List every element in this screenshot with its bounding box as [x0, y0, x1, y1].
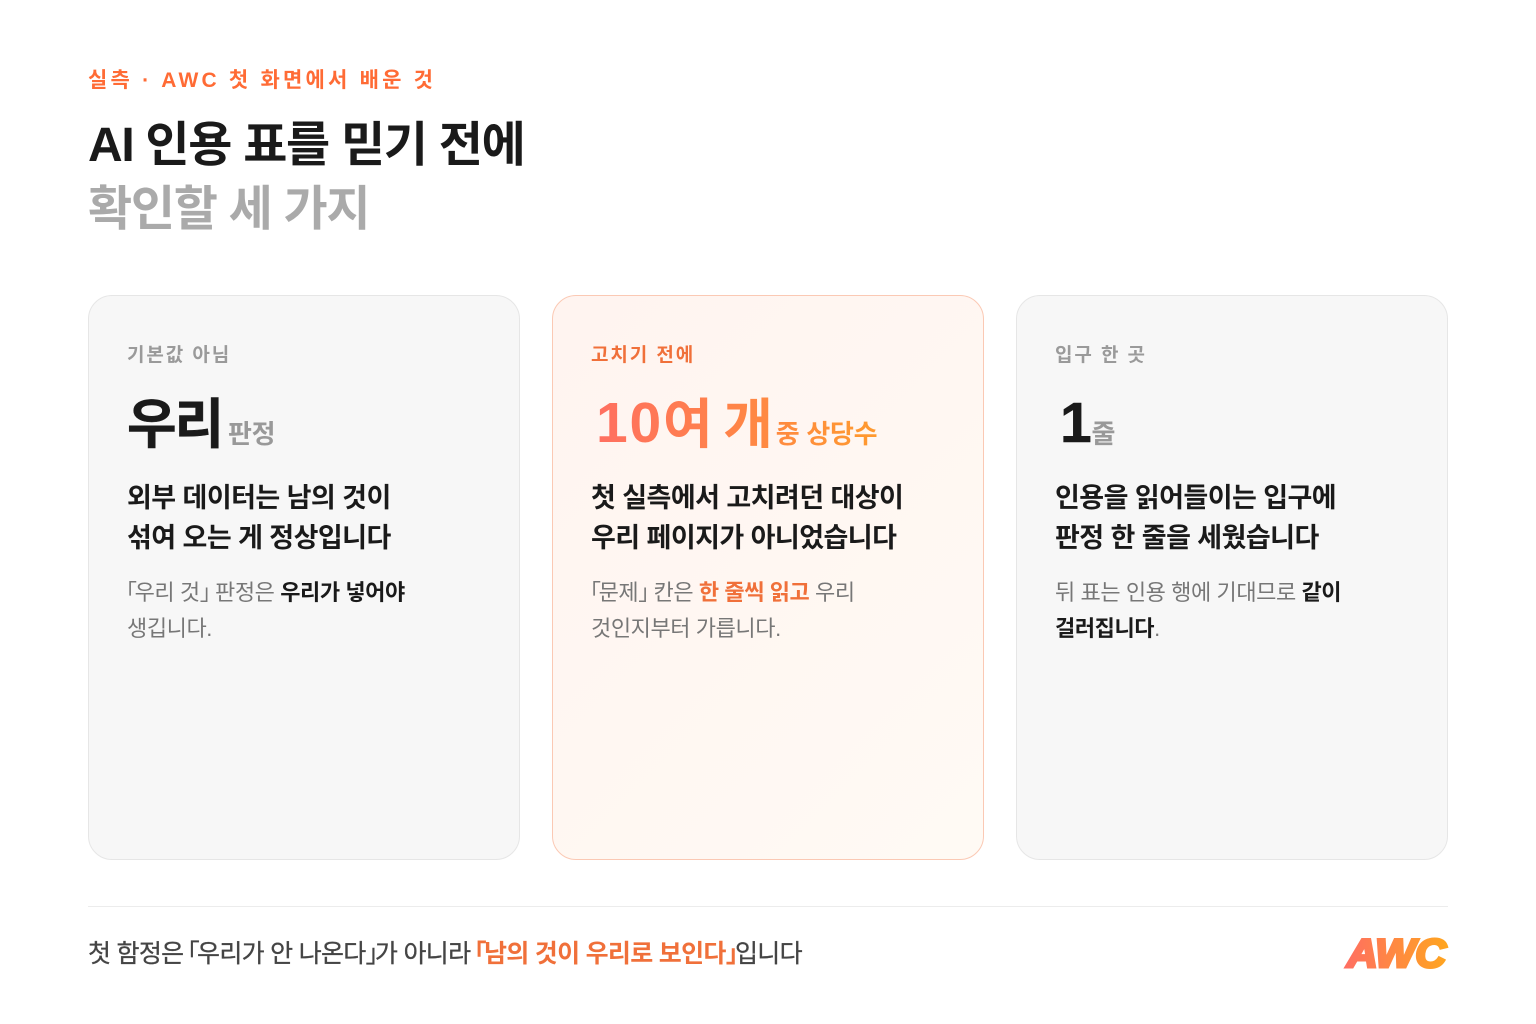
- card body text: 생깁니다.: [127, 616, 212, 641]
- card heading: 우리 페이지가 아니었습니다: [591, 523, 896, 553]
- card heading: 인용을 읽어들이는 입구에: [1055, 483, 1336, 513]
- card body text: [579, 580, 855, 641]
- title: AI 인용 표를 믿기 전에: [88, 119, 524, 172]
- card body text: 「문제」 칸은 한 줄씩 읽고 우리: [579, 580, 855, 605]
- footer takeaway: 첫 함정은 「우리가 안 나온다」가 아니라 「남의 것이 우리로 보인다」입니다: [88, 940, 802, 968]
- card heading: 섞여 오는 게 정상입니다: [127, 523, 391, 553]
- card label: 기본값 아님: [127, 345, 231, 366]
- panel: one entry card: [1016, 295, 1448, 860]
- card body text: 걸러집니다.: [1055, 616, 1160, 641]
- title: 확인할 세 가지: [88, 183, 369, 236]
- card body text: 것인지부터 가릅니다.: [591, 616, 781, 641]
- card heading: 첫 실측에서 고치려던 대상이: [591, 483, 903, 513]
- card heading: 외부 데이터는 남의 것이: [127, 483, 391, 513]
- card label: 고치기 전에: [591, 345, 695, 366]
- big figure: 우리판정: [127, 395, 275, 455]
- card body text: 뒤 표는 인용 행에 기대므로 같이: [1055, 580, 1341, 605]
- card heading: [591, 483, 903, 553]
- card body text: [1055, 580, 1341, 641]
- card heading: [127, 483, 391, 553]
- big figure: 1줄: [1060, 391, 1115, 455]
- card heading: [1055, 483, 1336, 553]
- eyebrow: 실측 · AWC 첫 화면에서 배운 것: [88, 69, 436, 92]
- panel: before fixing card: [552, 295, 984, 860]
- card body text: [115, 580, 405, 641]
- panel: default value card: [88, 295, 520, 860]
- title: [88, 119, 524, 236]
- card label: 입구 한 곳: [1055, 345, 1147, 366]
- card body text: 「우리 것」 판정은 우리가 넣어야: [115, 580, 405, 605]
- card heading: 판정 한 줄을 세웠습니다: [1055, 523, 1319, 553]
